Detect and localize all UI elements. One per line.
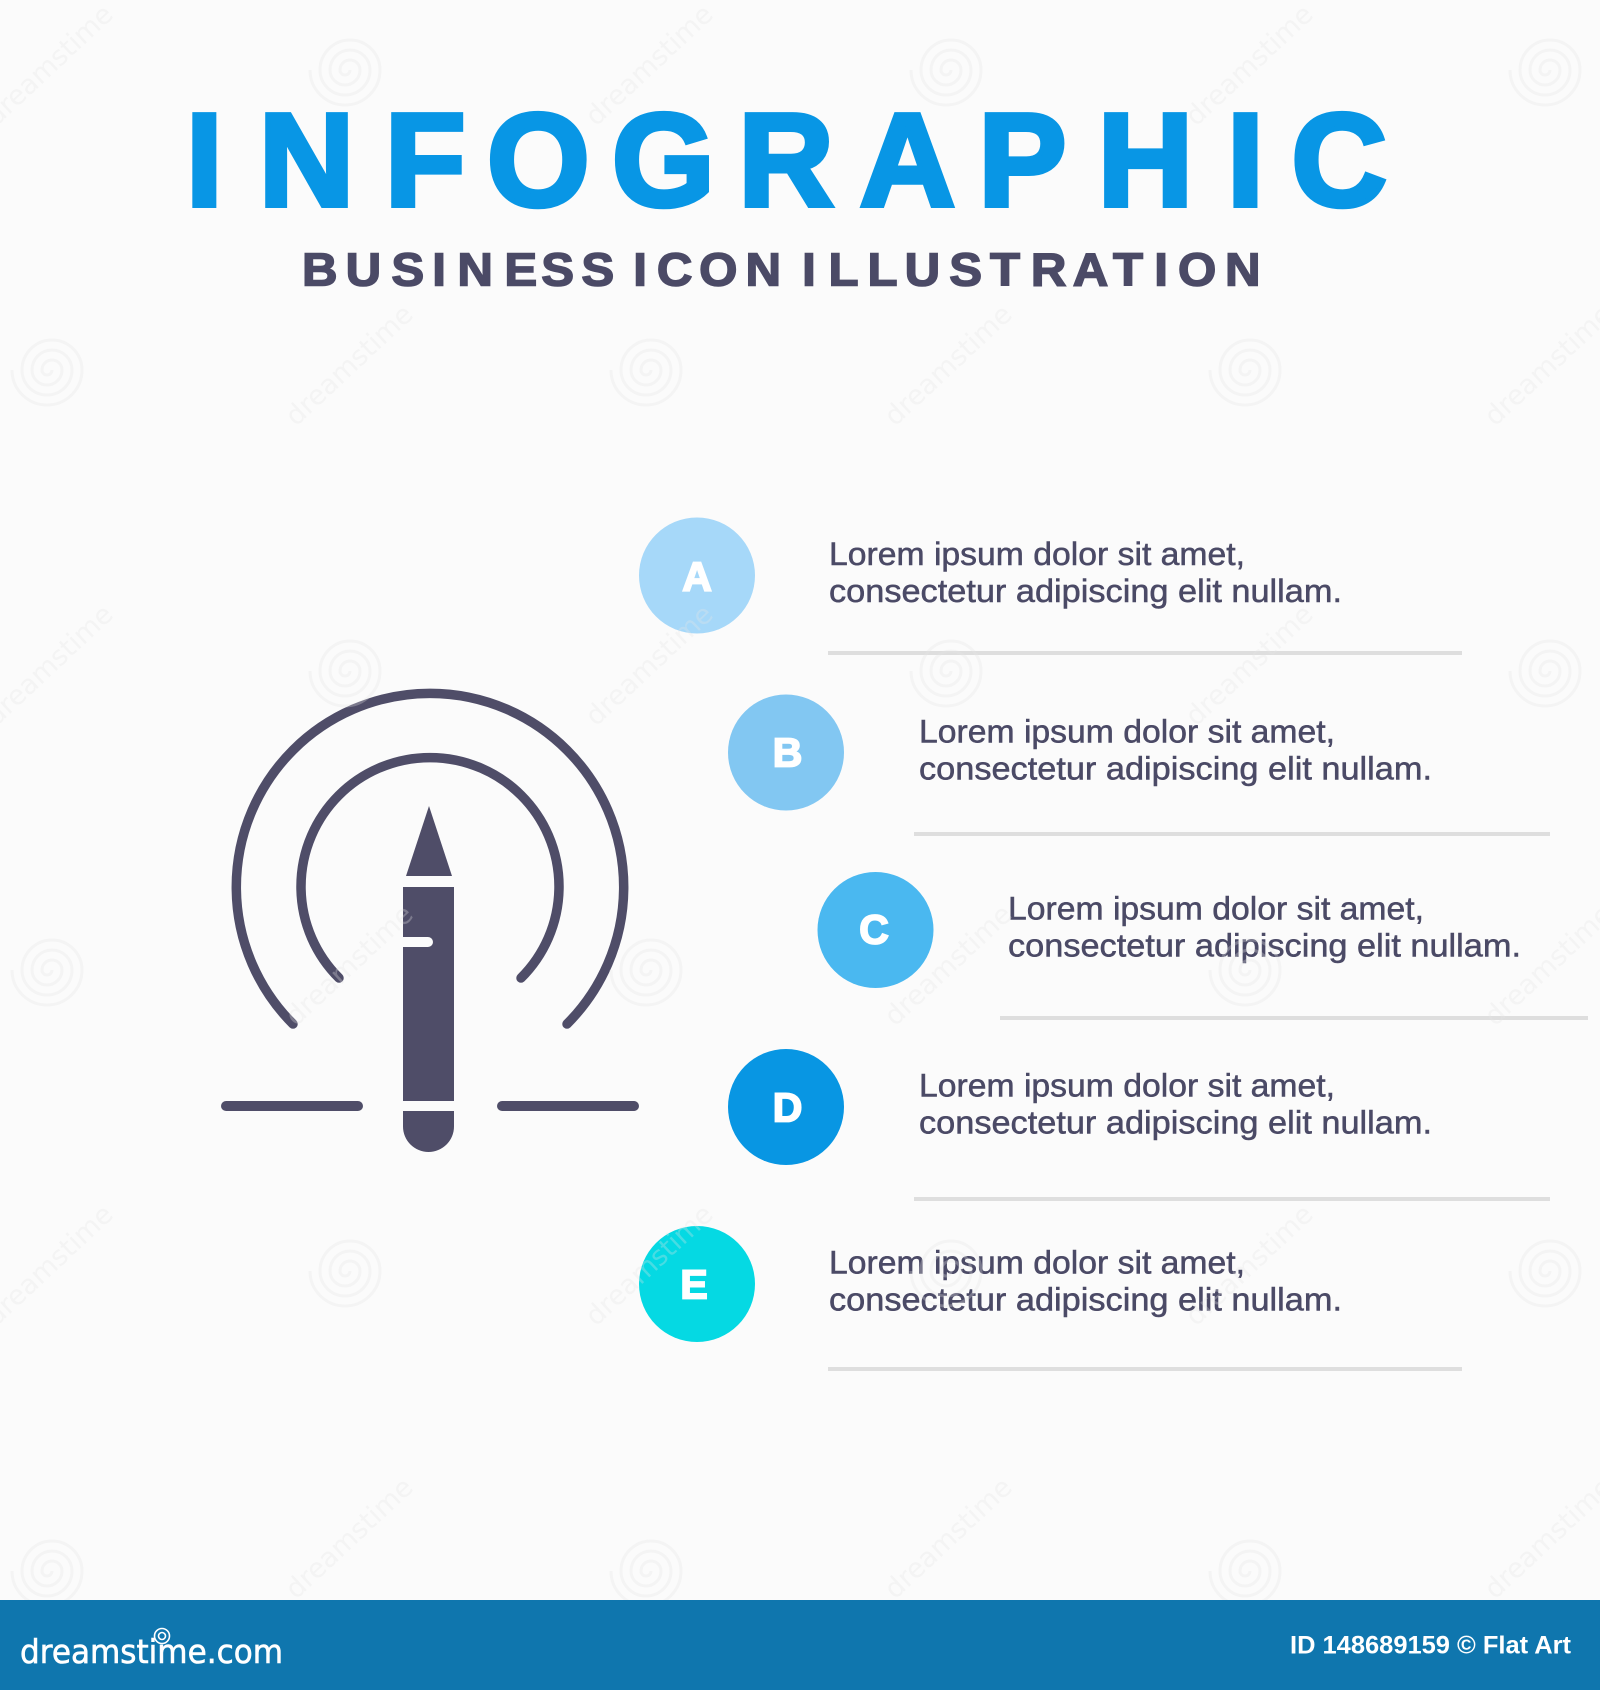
icon: logo spiral	[154, 1628, 170, 1644]
footer bar	[0, 1600, 1600, 1690]
text D line 1: Lorem ipsum dolor sit amet,	[919, 1068, 1335, 1104]
letter D: D	[773, 1084, 802, 1130]
item C	[818, 872, 1588, 1020]
watermark pattern: dreamstime	[879, 1472, 1018, 1605]
icon part: outer arc	[236, 693, 624, 1024]
letter B: B	[773, 730, 802, 776]
letter E: E	[680, 1262, 708, 1308]
badge A	[639, 518, 755, 634]
letter A: A	[682, 554, 712, 600]
watermark pattern: dreamstime	[280, 899, 419, 1032]
icon part: left ground line	[221, 1101, 363, 1111]
text E line 1: Lorem ipsum dolor sit amet,	[829, 1244, 1245, 1280]
icon part: right ground line	[497, 1101, 639, 1111]
text B line 1: Lorem ipsum dolor sit amet,	[919, 714, 1335, 750]
badge D	[728, 1049, 844, 1165]
watermark pattern: dreamstime	[280, 1472, 419, 1605]
footer image id: ID 148689159 © Flat Art	[1290, 1632, 1572, 1660]
badge B	[728, 694, 844, 810]
watermark pattern: dreamstime	[1180, 1199, 1319, 1332]
rule C	[1000, 1016, 1588, 1020]
text D line 2: consectetur adipiscing elit nullam.	[919, 1104, 1432, 1140]
rule E	[828, 1367, 1462, 1371]
item B	[728, 694, 1550, 836]
badge C	[818, 872, 934, 988]
text B line 2: consectetur adipiscing elit nullam.	[919, 750, 1432, 786]
item E	[639, 1226, 1462, 1371]
watermark pattern: dreamstime	[280, 299, 419, 432]
item D	[728, 1049, 1550, 1201]
icon part: pencil body	[403, 887, 454, 1101]
watermark pattern: dreamstime	[580, 0, 719, 132]
watermark pattern: dreamstime	[1180, 0, 1319, 132]
rule A	[828, 651, 1462, 655]
icon: pencil with signal arcs	[221, 693, 639, 1152]
watermark pattern: dreamstime	[879, 299, 1018, 432]
text C line 1: Lorem ipsum dolor sit amet,	[1008, 890, 1424, 926]
title: INFOGRAPHIC	[186, 86, 1387, 234]
watermark pattern: dreamstime	[580, 599, 719, 732]
subtitle: BUSINESS ICON ILLUSTRATION	[302, 245, 1261, 296]
text A line 2: consectetur adipiscing elit nullam.	[829, 573, 1342, 609]
badge E	[639, 1226, 755, 1342]
watermark pattern: dreamstime	[1180, 599, 1319, 732]
text E line 2: consectetur adipiscing elit nullam.	[829, 1282, 1342, 1318]
rule D	[914, 1197, 1550, 1201]
icon part: inner arc	[301, 758, 559, 978]
text C line 2: consectetur adipiscing elit nullam.	[1008, 928, 1521, 964]
item A	[639, 518, 1462, 655]
text A line 1: Lorem ipsum dolor sit amet,	[829, 536, 1245, 572]
watermark pattern: dreamstime	[879, 899, 1018, 1032]
icon part: pencil end	[403, 1111, 454, 1152]
letter C: C	[859, 906, 889, 952]
icon part: pencil tip	[406, 806, 452, 876]
watermark pattern: dreamstime	[580, 1199, 719, 1332]
rule B	[914, 832, 1550, 836]
footer logo text: dreamstime.com	[20, 1632, 283, 1671]
